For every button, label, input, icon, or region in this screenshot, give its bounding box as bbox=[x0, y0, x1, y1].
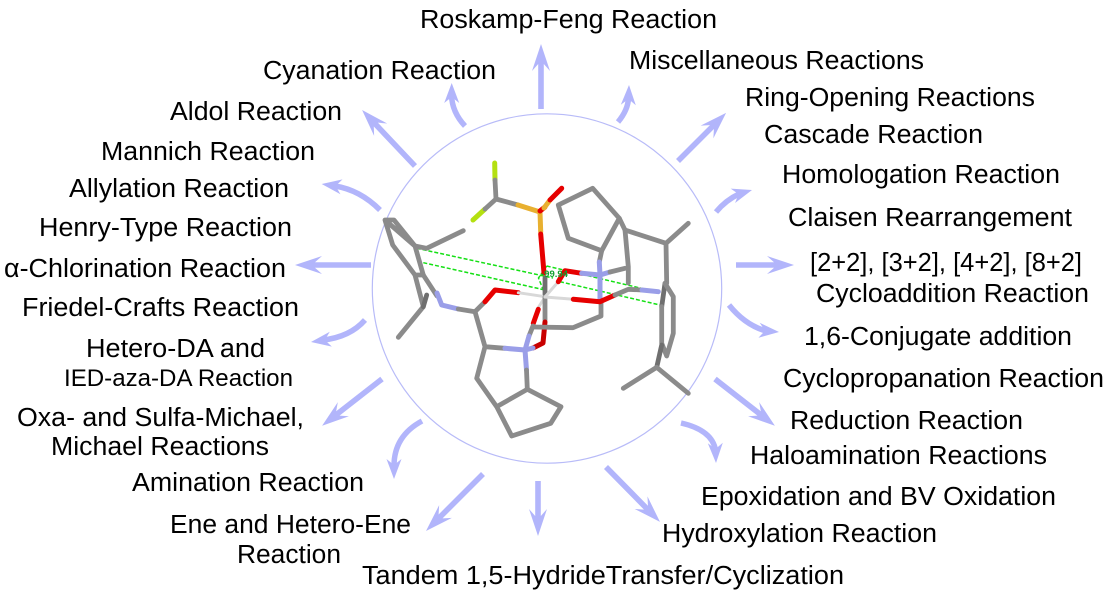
curved arrow: to Hetero-DA bbox=[310, 320, 365, 349]
label: Oxa- and Sulfa-Michael bbox=[17, 404, 304, 461]
left aryl ring with isopropyl groups bbox=[385, 220, 463, 337]
hydrogen-bond dashed lines bbox=[417, 248, 660, 305]
label: Reduction: Reduction Reaction bbox=[790, 407, 1023, 435]
label: Cycloaddition: Cycloaddition Reaction bbox=[816, 280, 1089, 308]
label: Amination: Amination Reaction bbox=[132, 469, 364, 497]
curved arrow: to Miscellaneous bbox=[618, 85, 636, 122]
label: Hetero-DA: Hetero-DA and bbox=[86, 335, 265, 363]
arrow: to Tandem bbox=[529, 481, 547, 536]
right aryl ring with isopropyl group bbox=[623, 283, 688, 393]
label: Claisen: Claisen Rearrangement bbox=[788, 204, 1072, 232]
label: Ene and Hetero-Ene bbox=[170, 511, 411, 569]
label: Epoxidation: Epoxidation and BV Oxidation bbox=[701, 483, 1056, 511]
label: Henry-Type: Henry-Type Reaction bbox=[39, 214, 292, 242]
label: Hetero-DA: IED-aza-DA Reaction bbox=[64, 365, 293, 392]
label: Tandem: Tandem 1,5-HydrideTransfer/Cyclization bbox=[362, 562, 844, 590]
arrow: to Ene bbox=[420, 468, 489, 537]
label: Cascade: Cascade Reaction bbox=[764, 121, 983, 149]
label: Oxa- and Sulfa-Michael: Michael Reactions bbox=[51, 433, 269, 461]
arrow: to Cycloaddition bbox=[736, 256, 794, 274]
angle label: -99.94 bbox=[541, 269, 569, 280]
label: Haloamination: Haloamination Reactions bbox=[750, 442, 1047, 470]
molecular structure of the complex bbox=[385, 163, 688, 436]
label: Miscellaneous: Miscellaneous Reactions bbox=[629, 47, 924, 75]
upper right bicyclic ring bbox=[558, 188, 688, 301]
arrow: to Hydroxylation bbox=[600, 461, 666, 528]
label: alpha-Chlorination: α-Chlorination Reaction bbox=[4, 255, 286, 283]
label: Ene and Hetero-Ene: Reaction bbox=[237, 541, 341, 569]
label: 1,6-Conjugate addition: 1,6-Conjugate addition bbox=[804, 323, 1072, 351]
label: Cycloaddition bbox=[810, 249, 1089, 308]
label: Aldol: Aldol Reaction bbox=[170, 98, 342, 126]
label: Hetero-DA bbox=[64, 335, 293, 392]
label: Oxa- and Sulfa-Michael: Oxa- and Sulfa-Michael, bbox=[17, 404, 304, 432]
curved arrow: to Allylation bbox=[321, 177, 380, 210]
label: Allylation: Allylation Reaction bbox=[69, 175, 289, 203]
arrow: to Aldol bbox=[356, 104, 422, 172]
catalyst circle bbox=[372, 114, 722, 463]
label: Cyanation: Cyanation Reaction bbox=[263, 57, 496, 85]
label: Ring-Opening: Ring-Opening Reactions bbox=[745, 84, 1035, 112]
curved arrow: to Cyanation bbox=[444, 83, 465, 126]
arrow: to alpha-Chlorination bbox=[295, 256, 371, 274]
right N-oxide and amide linker bbox=[545, 271, 658, 302]
lower bicyclic ring bbox=[477, 347, 561, 436]
curved arrow: to Epoxidation bbox=[681, 423, 723, 463]
triflate group bbox=[473, 163, 562, 296]
label: Roskamp-Feng: Roskamp-Feng Reaction bbox=[420, 6, 717, 34]
curved arrow: to 1,6-Conjugate addition bbox=[729, 305, 780, 339]
arrow: to Reduction bbox=[709, 372, 780, 433]
label: Cyclopropanation: Cyclopropanation Reaction bbox=[783, 365, 1104, 393]
label: Homologation: Homologation Reaction bbox=[782, 161, 1060, 189]
label: Cycloaddition: [2+2], [3+2], [4+2], [8+2] bbox=[810, 249, 1082, 277]
curved arrow: to Amination bbox=[386, 421, 422, 479]
curved arrow: to Homologation bbox=[716, 183, 754, 212]
left amide linker bbox=[437, 290, 545, 350]
label: Friedel-Crafts: Friedel-Crafts Reaction bbox=[22, 294, 299, 322]
arrow: to Roskamp-Feng bbox=[532, 44, 550, 109]
arrow: to Oxa-Michael bbox=[317, 372, 388, 433]
label: Hydroxylation: Hydroxylation Reaction bbox=[662, 520, 937, 548]
arrow: to Ring-Opening bbox=[672, 107, 732, 167]
label: Mannich: Mannich Reaction bbox=[101, 138, 315, 166]
label: Ene and Hetero-Ene: Ene and Hetero-Ene bbox=[170, 511, 411, 539]
metal centre and lower N-oxide bbox=[525, 297, 601, 350]
